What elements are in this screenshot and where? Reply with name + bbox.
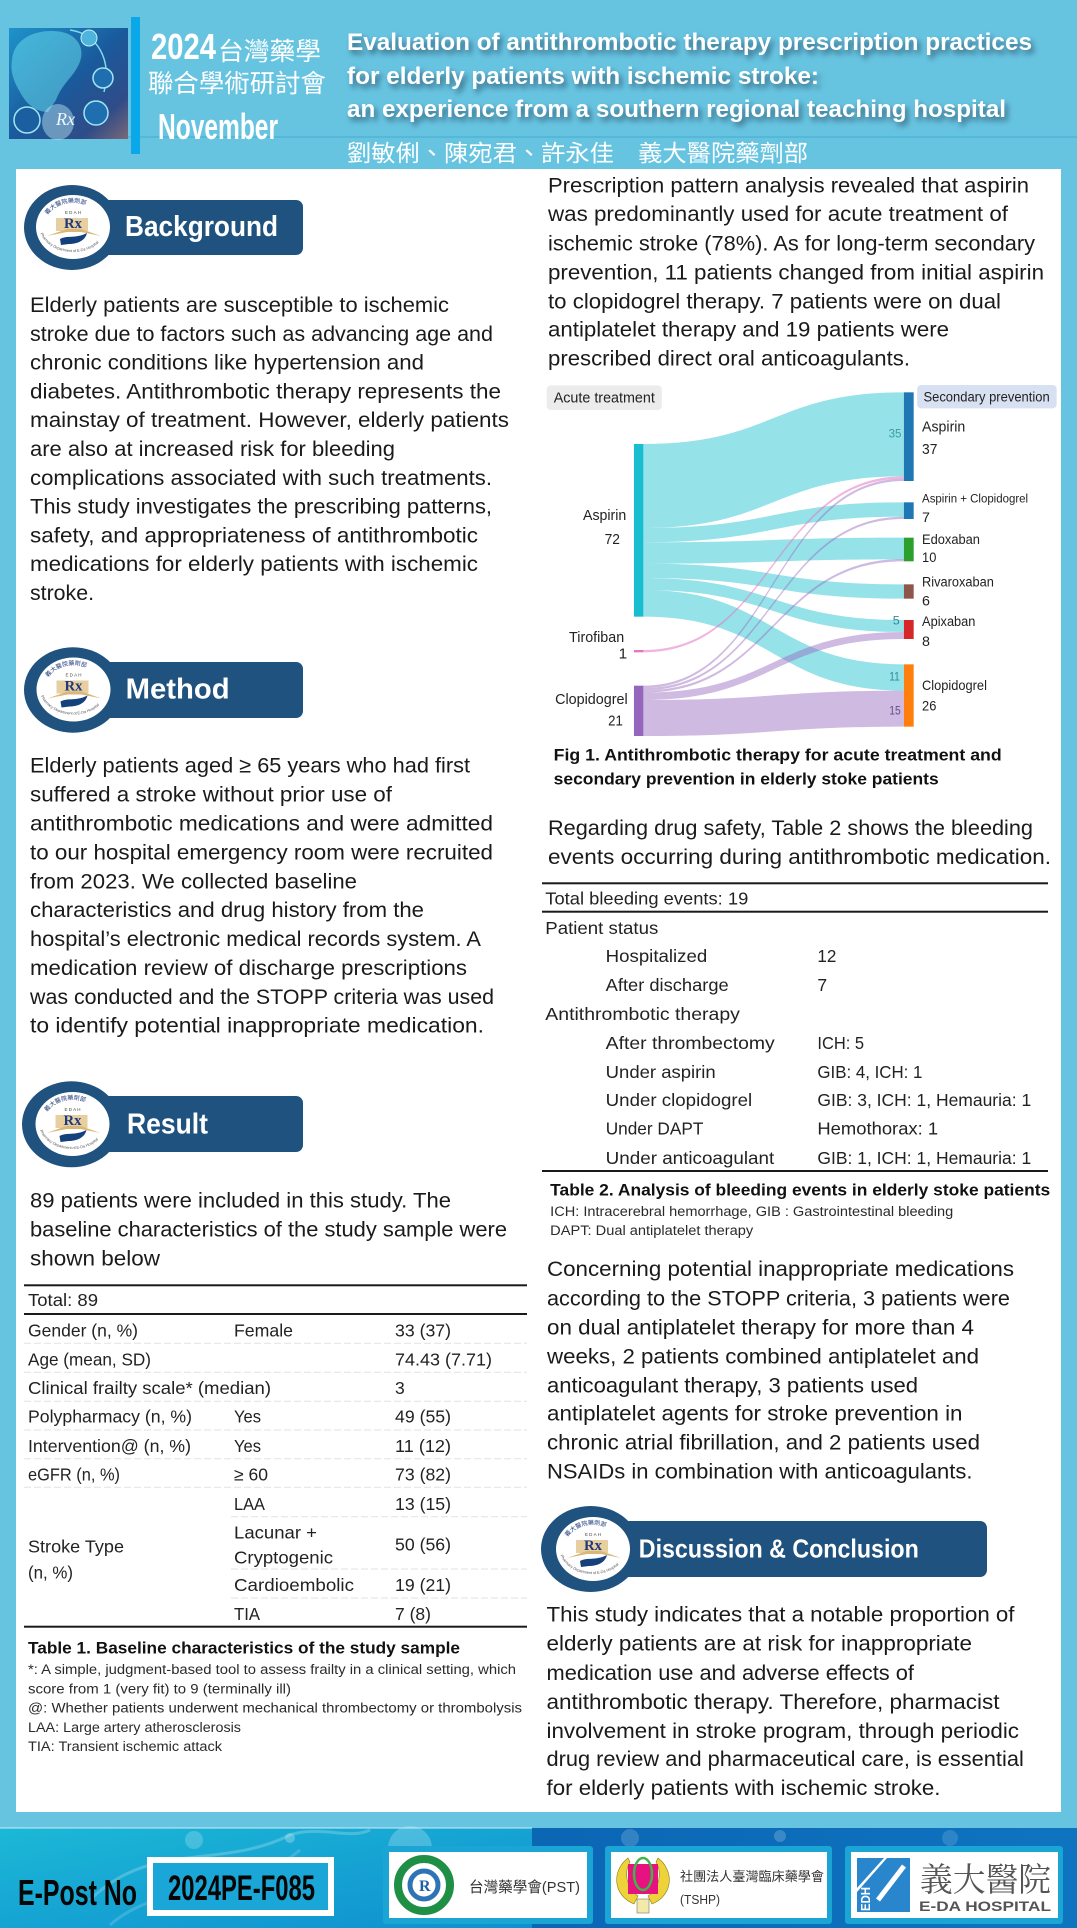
heading: Background: Background [125, 211, 278, 243]
sankey chart: acute treatment to secondary prevention: Tirofiban [569, 629, 624, 646]
text: drug safety intro: Regarding drug safety, Table 2 shows the bleeding [548, 816, 1033, 840]
text: background paragraph: Elderly patients are susceptible to ischemic [30, 293, 449, 317]
accent bar [131, 17, 140, 154]
heading: Discussion & Conclusion: Pharmacy Department of E-Da Hospital [560, 1554, 618, 1574]
heading: Result [22, 1081, 303, 1168]
footer band [0, 1826, 1077, 1928]
figure 1 caption [554, 746, 1002, 788]
table 1: baseline characteristics: Female [234, 1321, 293, 1341]
table 1: baseline characteristics: eGFR (n, %) [28, 1465, 120, 1485]
heading: Method [24, 647, 303, 733]
text: conclusion paragraph: elderly patients are at risk for inappropriate [546, 1632, 972, 1656]
sankey chart: acute treatment to secondary prevention: Clopidogrel [922, 677, 987, 693]
heading: Discussion & Conclusion [541, 1506, 987, 1592]
text: method paragraph: to identify potential inappropriate medication. [30, 1014, 484, 1038]
logo: TSHP [605, 1846, 832, 1924]
sankey chart: acute treatment to secondary prevention: Rivaroxaban [922, 574, 994, 590]
heading: Background: EDAH [65, 210, 81, 215]
text: conclusion paragraph [546, 1603, 1024, 1800]
table 1: baseline characteristics [24, 1284, 527, 1628]
table 1: baseline characteristics: 33 (37) [395, 1321, 451, 1341]
text: conclusion paragraph: drug review and pharmaceutical care, is essential [546, 1747, 1024, 1771]
table 1: baseline characteristics: TIA [234, 1604, 260, 1624]
table 2: bleeding events: Under anticoagulant [606, 1148, 774, 1168]
text: method paragraph: antithrombotic medications and were admitted [30, 812, 493, 836]
sankey chart: acute treatment to secondary prevention: 7 [922, 509, 930, 525]
text: background paragraph: are also at increased risk for bleeding [30, 437, 395, 461]
heading: Result: EDAH [64, 1107, 80, 1112]
text: STOPP criteria paragraph: weeks, 2 patients combined antiplatelet and [546, 1344, 979, 1368]
sankey chart: acute treatment to secondary prevention: 11 [889, 670, 900, 684]
table 2: bleeding events: GIB: 1, ICH: 1, Hemauria: 1 [817, 1148, 1031, 1168]
text: result intro [30, 1189, 507, 1271]
header image: brain and pharmacy icons: Rx [55, 109, 75, 129]
sankey chart: acute treatment to secondary prevention: 37 [922, 441, 937, 458]
table 1: baseline characteristics: Gender (n, %) [28, 1321, 138, 1341]
table 2: bleeding events: GIB: 4, ICH: 1 [817, 1062, 922, 1082]
sankey chart: acute treatment to secondary prevention: Acute treatment [554, 390, 656, 406]
title: for elderly patients with ischemic stroke: [347, 63, 819, 90]
table 1: baseline characteristics: Age (mean, SD) [28, 1350, 151, 1370]
heading: Method: EDAH [66, 672, 82, 678]
heading: Method: Pharmacy Department of E-Da Hospital [41, 695, 99, 715]
sankey chart: acute treatment to secondary prevention: Edoxaban [922, 531, 980, 547]
table 1 caption and notes: @: Whether patients underwent mechanical thrombectomy or thrombolysis [28, 1700, 522, 1715]
table 1: baseline characteristics: 11 (12) [395, 1436, 451, 1456]
text: background paragraph [30, 293, 509, 605]
table 1: baseline characteristics: Yes [234, 1407, 261, 1427]
e-poster number: 2024PE-F085 [168, 1869, 315, 1908]
text: background paragraph: This study investigates the prescribing patterns, [30, 495, 492, 519]
title: Evaluation of antithrombotic therapy prescription practices [347, 29, 1032, 56]
table 1: baseline characteristics: 74.43 (7.71) [395, 1350, 492, 1370]
text: drug safety intro: events occurring during antithrombotic medication. [548, 845, 1051, 869]
table 1 caption and notes: *: A simple, judgment-based tool to assess frailty in a clinical setting, which [28, 1662, 516, 1677]
heading: Background: 義大醫院藥劑部 [44, 198, 87, 214]
table 1: baseline characteristics: Polypharmacy (n, %) [28, 1407, 192, 1427]
table 1 caption and notes: TIA: Transient ischemic attack [28, 1739, 222, 1754]
heading: Background [24, 185, 303, 270]
text: STOPP criteria paragraph: antiplatelet agents for stroke prevention in [547, 1402, 962, 1426]
sankey chart: acute treatment to secondary prevention: Secondary prevention [923, 389, 1050, 404]
text: conclusion paragraph: medication use and adverse effects of [546, 1661, 914, 1685]
text: STOPP criteria paragraph: Concerning potential inappropriate medications [547, 1257, 1014, 1281]
text: result intro: shown below [30, 1247, 160, 1271]
title: an experience from a southern regional teaching hospital [347, 96, 1006, 123]
table 2: bleeding events: ICH: 5 [817, 1033, 864, 1053]
text: STOPP criteria paragraph: anticoagulant therapy, 3 patients used [547, 1373, 918, 1397]
sankey chart: acute treatment to secondary prevention: 15 [889, 704, 901, 718]
logo: PST: 台灣藥學會(PST) [469, 1878, 580, 1896]
table 2: bleeding events: Total bleeding events: 19 [545, 889, 748, 909]
text: result intro: 89 patients were included in this study. The [30, 1189, 451, 1213]
heading: Result: Pharmacy Department of E-Da Hospital [40, 1130, 98, 1150]
sankey chart: acute treatment to secondary prevention: 5 [893, 614, 900, 627]
table 2 caption and notes: Table 2. Analysis of bleeding events in elderly stoke patients [550, 1180, 1050, 1199]
text: background paragraph: diabetes. Antithrombotic therapy represents the [30, 379, 501, 403]
text: result intro: baseline characteristics of the study sample were [30, 1218, 507, 1242]
heading: Method: Rx [64, 678, 83, 694]
heading: Background: Rx [64, 216, 82, 232]
table 1: baseline characteristics: LAA [234, 1494, 265, 1514]
text: prescription pattern paragraph: ischemic stroke (78%). As for long-term secondary [548, 232, 1035, 256]
logo: E-DA Hospital: E-DA HOSPITAL [919, 1898, 1052, 1914]
authors and affiliation: 劉敏俐、陳宛君、許永佳 義大醫院藥劑部 [347, 140, 808, 166]
table 2: bleeding events: Patient status [545, 918, 659, 938]
text: drug safety intro [548, 816, 1051, 869]
heading: Method: 義大醫院藥劑部 [45, 660, 88, 677]
text: prescription pattern paragraph: Prescription pattern analysis revealed that aspirin [548, 173, 1029, 197]
header image: brain and pharmacy icons [9, 28, 128, 140]
table 2: bleeding events: Antithrombotic therapy [545, 1004, 740, 1024]
sankey chart: acute treatment to secondary prevention: 72 [605, 531, 620, 548]
sankey chart: acute treatment to secondary prevention: 35 [889, 427, 902, 441]
table 2: bleeding events: After discharge [606, 975, 729, 995]
table 1: baseline characteristics: 19 (21) [395, 1575, 451, 1595]
table 2: bleeding events [542, 882, 1048, 1172]
sankey chart: acute treatment to secondary prevention: 1 [619, 646, 627, 663]
text: background paragraph: complications associated with such treatments. [30, 466, 492, 490]
text: method paragraph: to our hospital emergency room were recruited [30, 840, 493, 864]
table 1: baseline characteristics: Cardioembolic [234, 1575, 354, 1595]
sankey chart: acute treatment to secondary prevention: 21 [608, 713, 623, 729]
text: prescription pattern paragraph: antiplatelet therapy and 19 patients were [548, 318, 949, 342]
logo: PST [383, 1846, 593, 1924]
sankey chart: acute treatment to secondary prevention: Aspirin [583, 507, 626, 524]
title [347, 29, 1032, 123]
table 2 caption and notes: DAPT: Dual antiplatelet therapy [550, 1223, 753, 1238]
text: method paragraph [29, 754, 494, 1038]
table 1: baseline characteristics: 50 (56) [395, 1535, 451, 1555]
heading: Result: Rx [64, 1113, 82, 1129]
text: prescription pattern paragraph: prescribed direct oral anticoagulants. [548, 347, 910, 371]
sankey chart: acute treatment to secondary prevention: Clopidogrel [555, 691, 628, 708]
text: method paragraph: Elderly patients aged ≥ 65 years who had first [30, 754, 470, 778]
heading: Method: Method [126, 674, 230, 706]
table 1 caption and notes: LAA: Large artery atherosclerosis [28, 1720, 241, 1735]
heading: Result: 義大醫院藥劑部 [44, 1094, 86, 1112]
table 1 caption and notes [28, 1638, 522, 1754]
table 2: bleeding events: 12 [817, 946, 836, 966]
text: method paragraph: suffered a stroke without prior use of [30, 783, 392, 807]
table 1: baseline characteristics: 49 (55) [395, 1407, 451, 1427]
text: prescription pattern paragraph: prevention, 11 patients changed from initial aspirin [548, 260, 1044, 284]
text: method paragraph: hospital’s electronic medical records system. A [30, 927, 482, 951]
header divider line [9, 136, 1077, 138]
table 1: baseline characteristics: Cryptogenic [234, 1547, 333, 1567]
logo: E-DA Hospital: 義大醫院 [920, 1862, 1051, 1899]
text: background paragraph: mainstay of treatment. However, elderly patients [30, 408, 509, 432]
logo: TSHP: 社團法人臺灣臨床藥學會 [680, 1869, 824, 1884]
conference label: 台灣藥學 [218, 38, 321, 66]
sankey chart: acute treatment to secondary prevention [547, 385, 1057, 736]
logo: E-DA Hospital: EDH [858, 1887, 873, 1911]
text: prescription pattern paragraph [547, 173, 1044, 371]
heading: Result: Result [127, 1108, 208, 1140]
text: STOPP criteria paragraph: chronic atrial fibrillation, and 2 patients used [547, 1430, 980, 1454]
table 1: baseline characteristics: Lacunar + [234, 1522, 317, 1542]
sankey chart: acute treatment to secondary prevention: 10 [922, 549, 937, 565]
text: conclusion paragraph: antithrombotic therapy. Therefore, pharmacist [546, 1690, 1000, 1714]
table 1 caption and notes: score from 1 (very fit) to 9 (terminally ill) [28, 1681, 291, 1696]
text: method paragraph: was conducted and the STOPP criteria was used [29, 985, 494, 1009]
text: conclusion paragraph: for elderly patients with ischemic stroke. [546, 1776, 940, 1800]
text: STOPP criteria paragraph: on dual antiplatelet therapy for more than 4 [547, 1316, 974, 1340]
table 1: baseline characteristics: (n, %) [28, 1562, 73, 1582]
table 1: baseline characteristics: Stroke Type [28, 1537, 124, 1557]
e-poster number [18, 1860, 331, 1913]
table 1: baseline characteristics: Intervention@ (n, %) [28, 1436, 191, 1456]
text: background paragraph: stroke. [30, 581, 94, 605]
text: conclusion paragraph: involvement in stroke program, through periodic [546, 1719, 1019, 1743]
conference label [148, 26, 326, 147]
e-poster number: E-Post No [18, 1872, 137, 1913]
sankey chart: acute treatment to secondary prevention: Aspirin [922, 419, 965, 435]
text: prescription pattern paragraph: was predominantly used for acute treatment of [547, 202, 1008, 226]
table 1: baseline characteristics: Yes [234, 1436, 261, 1456]
figure 1 caption: Fig 1. Antithrombotic therapy for acute treatment and [554, 746, 1002, 765]
text: STOPP criteria paragraph [546, 1257, 1014, 1483]
text: background paragraph: safety, and appropriateness of antithrombotic [30, 523, 478, 547]
heading: Discussion & Conclusion: EDAH [585, 1532, 601, 1537]
table 2: bleeding events: Under DAPT [606, 1119, 704, 1139]
table 2 caption and notes: ICH: Intracerebral hemorrhage, GIB : Gastrointestinal bleeding [550, 1204, 953, 1219]
table 1: baseline characteristics: Total: 89 [28, 1290, 98, 1310]
conference label: November [158, 106, 278, 147]
table 2: bleeding events: Hospitalized [606, 946, 707, 966]
table 1: baseline characteristics: ≥ 60 [234, 1465, 268, 1485]
table 1: baseline characteristics: Clinical frailty scale* (median) [28, 1378, 271, 1398]
text: STOPP criteria paragraph: according to the STOPP criteria, 3 patients were [547, 1286, 1010, 1310]
text: method paragraph: medication review of discharge prescriptions [30, 956, 467, 980]
text: conclusion paragraph: This study indicates that a notable proportion of [546, 1603, 1015, 1627]
sankey chart: acute treatment to secondary prevention: 8 [922, 633, 930, 649]
sankey chart: acute treatment to secondary prevention: Aspirin + Clopidogrel [922, 492, 1028, 506]
text: method paragraph: characteristics and drug history from the [30, 898, 424, 922]
logo: E-DA Hospital [845, 1846, 1063, 1924]
table 2: bleeding events: Under aspirin [606, 1062, 716, 1082]
table 1: baseline characteristics: 13 (15) [395, 1494, 451, 1514]
logo: PST: R [419, 1878, 431, 1895]
table 2: bleeding events: After thrombectomy [606, 1033, 775, 1053]
text: method paragraph: from 2023. We collected baseline [30, 869, 357, 893]
table 2: bleeding events: 7 [817, 975, 827, 995]
table 2: bleeding events: Under clopidogrel [606, 1090, 752, 1110]
conference label: 2024 [151, 26, 216, 67]
table 2: bleeding events: GIB: 3, ICH: 1, Hemauria: 1 [817, 1090, 1031, 1110]
text: prescription pattern paragraph: to clopidogrel therapy. 7 patients were on dual [548, 289, 1001, 313]
text: background paragraph: chronic conditions like hypertension and [30, 351, 424, 375]
table 1: baseline characteristics: 73 (82) [395, 1465, 451, 1485]
sankey chart: acute treatment to secondary prevention: 6 [922, 593, 930, 608]
heading: Discussion & Conclusion: Discussion & Conclusion [639, 1534, 919, 1564]
table 1: baseline characteristics: 7 (8) [395, 1604, 431, 1624]
sankey chart: acute treatment to secondary prevention: 26 [922, 698, 937, 714]
text: background paragraph: stroke due to factors such as advancing age and [30, 322, 493, 346]
table 2 caption and notes [550, 1180, 1050, 1238]
logo: TSHP: (TSHP) [680, 1892, 720, 1907]
text: background paragraph: medications for elderly patients with ischemic [30, 552, 478, 576]
heading: Discussion & Conclusion: Rx [584, 1538, 602, 1554]
sankey chart: acute treatment to secondary prevention: Apixaban [922, 613, 975, 629]
table 1 caption and notes: Table 1. Baseline characteristics of the study sample [28, 1638, 460, 1657]
table 2: bleeding events: Hemothorax: 1 [817, 1119, 938, 1139]
heading: Discussion & Conclusion: 義大醫院藥劑部 [564, 1520, 607, 1536]
conference label: 聯合學術研討會 [148, 70, 326, 98]
table 1: baseline characteristics: 3 [395, 1378, 405, 1398]
figure 1 caption: secondary prevention in elderly stoke patients [554, 769, 939, 788]
text: STOPP criteria paragraph: NSAIDs in combination with anticoagulants. [547, 1459, 972, 1483]
heading: Background: Pharmacy Department of E-Da Hospital [40, 232, 98, 252]
